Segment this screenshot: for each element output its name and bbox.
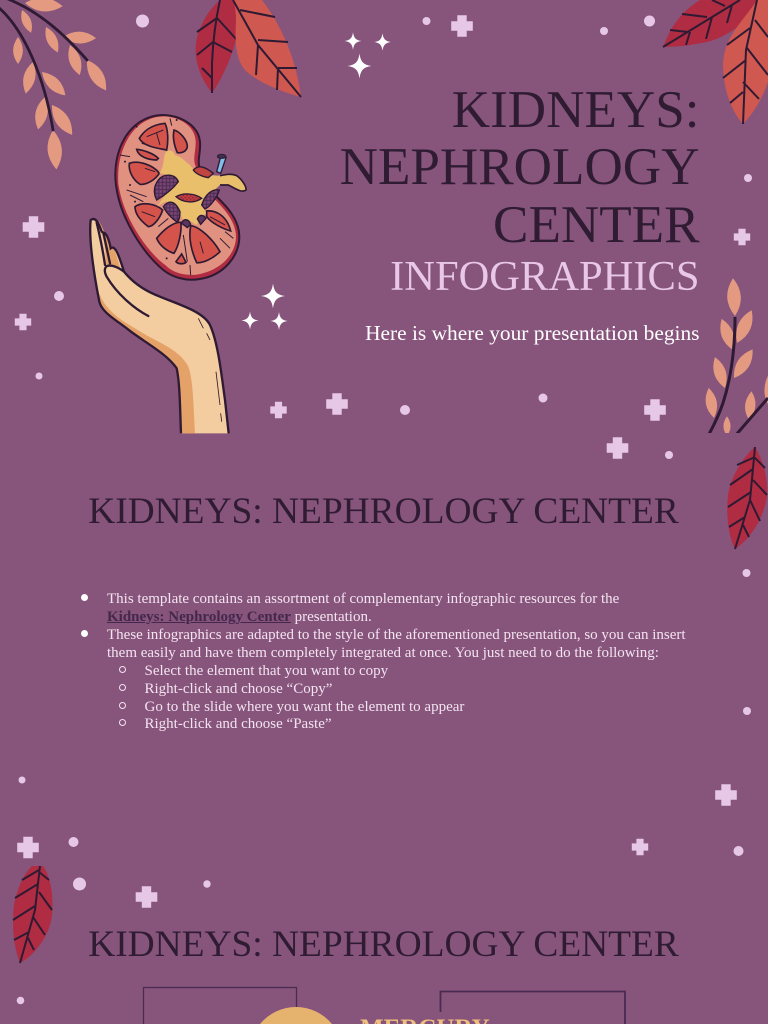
icon: right-side red leaf (727, 447, 767, 549)
icon: top-left peach branch (0, 0, 112, 170)
right outlined box (440, 992, 625, 1024)
icon: kidney cross-section (115, 115, 246, 280)
title line 2: NEPHROLOGY (340, 138, 700, 196)
icon: lower-left red leaf (13, 866, 53, 963)
line 1: This template contains an assortment of complementary infographic resources for the (107, 591, 619, 607)
orange circle (260, 1007, 332, 1024)
sub-bullet 1 (119, 666, 126, 673)
bullet 1 (80, 594, 88, 601)
heading: second slide: KIDNEYS: NEPHROLOGY CENTER (88, 491, 679, 532)
bullet 2 (80, 630, 88, 637)
icon: right peach branch (703, 278, 768, 436)
sub-bullet 4 (119, 719, 126, 726)
subtitle: INFOGRAPHICS (390, 253, 700, 300)
sub-bullet 3 (119, 702, 126, 709)
line 2: Kidneys: Nephrology Center presentation. (107, 609, 372, 625)
sparkles (241, 32, 391, 330)
sub-item 4: Right-click and choose “Paste” (144, 716, 332, 732)
line 3: These infographics are adapted to the style of the aforementioned presentation, so you can insert (107, 627, 686, 643)
heading: third slide: KIDNEYS: NEPHROLOGY CENTER (88, 924, 679, 965)
line 4: them easily and have them completely integrated at once. You just need to do the following: (107, 645, 659, 661)
icon: hand (90, 219, 229, 433)
sub-item 1: Select the element that you want to copy (144, 663, 388, 679)
text block: instructions (81, 591, 686, 732)
sub-bullet 2 (119, 684, 126, 691)
tagline: Here is where your presentation begins (365, 321, 700, 345)
icon: top-right red leaves (663, 0, 768, 124)
title: KIDNEYS: (452, 81, 700, 139)
title line 3: CENTER (493, 196, 700, 254)
sub-item 3: Go to the slide where you want the element to appear (144, 699, 464, 715)
sub-item 2: Right-click and choose “Copy” (144, 681, 332, 697)
icon: top centre red leaves (196, 0, 301, 97)
left outlined box (144, 988, 296, 1024)
